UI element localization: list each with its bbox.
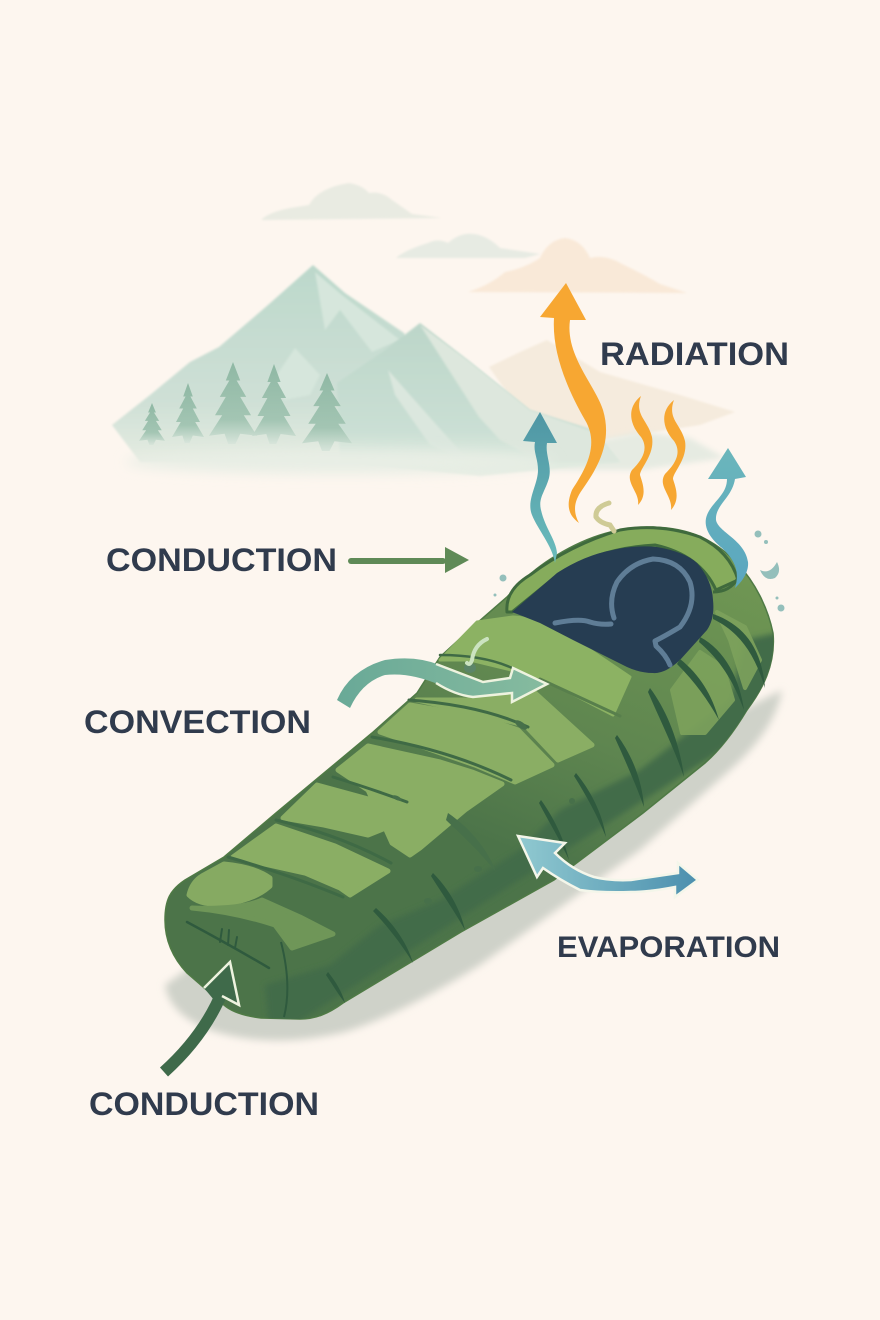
- toe slit: [187, 922, 269, 968]
- sleeper outline: [555, 559, 692, 665]
- mountain: orange distant: [489, 340, 735, 440]
- arrow: evaporation double: [518, 836, 698, 897]
- trees: [139, 362, 352, 451]
- panel: toe: [189, 864, 270, 904]
- arrow: radiation wave 2: [663, 400, 685, 510]
- tree 1: [139, 403, 165, 445]
- panel 6: [417, 693, 592, 760]
- sleeping bag: [165, 527, 800, 1040]
- arrow: radiation wave 1: [630, 396, 652, 505]
- arrow: evaporation up left: [523, 412, 557, 563]
- mountain: far range right: [540, 428, 725, 470]
- label: conduction top: CONDUCTION: [106, 542, 337, 578]
- arrow: conduction top: [348, 547, 469, 573]
- seam lines: [228, 655, 620, 897]
- label: convection: CONVECTION: [84, 704, 311, 740]
- tree 4: [252, 364, 296, 444]
- label: radiation: RADIATION: [600, 336, 789, 372]
- tree 3: [209, 362, 257, 444]
- toe stitch line: [281, 942, 287, 1017]
- label: evaporation: EVAPORATION: [557, 931, 780, 964]
- mist at the mountain base: [125, 450, 555, 474]
- light panels: [189, 693, 592, 948]
- mountain: main peak: [112, 265, 440, 462]
- vapour bubbles: [494, 530, 784, 612]
- panel: toe lower: [192, 900, 333, 948]
- collar tie line: [713, 578, 738, 592]
- stitch dots: [392, 719, 575, 904]
- ground shadow of sleeping bag: [165, 690, 782, 1041]
- darker lower side: [268, 632, 774, 1019]
- bag body: [165, 527, 773, 1019]
- droplet on flap: [464, 639, 487, 673]
- arrow: convection: [337, 658, 547, 708]
- panel 3: [283, 785, 406, 835]
- scenery: clouds and mountains: [112, 183, 735, 476]
- hood collar: [507, 528, 738, 612]
- tree 2: [172, 383, 204, 443]
- cloud: upper: [262, 183, 442, 220]
- mottled right side highlights: [672, 612, 760, 733]
- arrow: conduction bottom: [164, 962, 239, 1072]
- arrow: evaporation up right: [706, 448, 748, 588]
- cloud: middle: [396, 234, 540, 258]
- crescent: [760, 562, 779, 579]
- head: [612, 559, 692, 665]
- cloud: orange: [468, 238, 687, 293]
- hood opening: [512, 546, 713, 673]
- panel 4: [338, 746, 502, 855]
- panel 2: [233, 826, 388, 895]
- tree 5: [302, 373, 352, 451]
- mountain: second peak: [337, 323, 620, 476]
- upper flap: [440, 617, 630, 715]
- shoulder: [555, 620, 611, 624]
- squiggle: tan vapour: [596, 503, 614, 531]
- arrow: radiation large: [540, 283, 606, 523]
- dark side ribs: [326, 614, 765, 1003]
- label: conduction bottom: CONDUCTION: [89, 1086, 319, 1122]
- panel 5: [380, 705, 552, 782]
